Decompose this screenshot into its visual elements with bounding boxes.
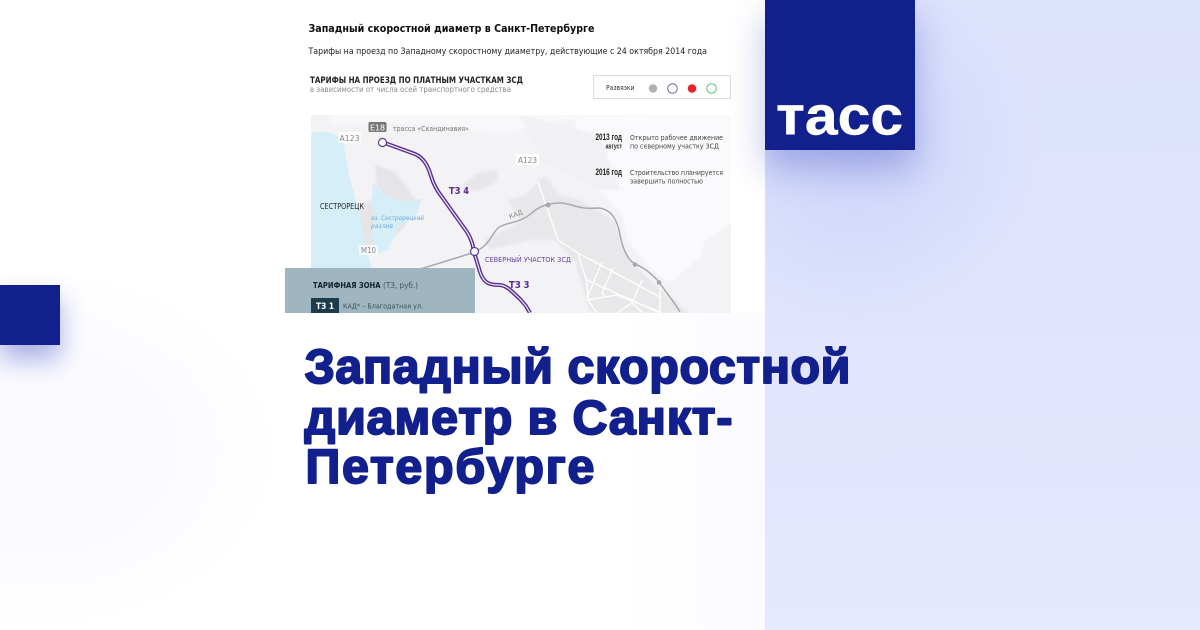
streets	[538, 182, 660, 313]
tariff zone panel: ТЗ 1	[316, 302, 334, 312]
decorative blue square	[0, 285, 60, 345]
road: KAD	[385, 203, 680, 312]
water: gulf	[311, 132, 372, 268]
tariff zone panel: ТАРИФНАЯ ЗОНА	[313, 281, 381, 290]
legend	[594, 76, 730, 98]
section label: northern section: СЕВЕРНЫЙ УЧАСТОК ЗСД	[485, 255, 571, 264]
road label: E18: Е18	[370, 124, 385, 132]
section heading: в зависимости от числа осей транспортного средства	[310, 85, 511, 94]
timeline note: 2013: август	[606, 142, 622, 150]
zone label: T3 4: ТЗ 4	[449, 186, 469, 197]
tariff zone panel: (ТЗ, руб.)	[383, 281, 418, 290]
logo: TASS: тасс	[776, 86, 903, 147]
road label: E18: трасса «Скандинавия»	[393, 125, 469, 133]
timeline note: 2016	[596, 167, 723, 186]
main title: диаметр в Санкт-	[304, 391, 732, 445]
main title: Петербурге	[306, 440, 594, 494]
timeline note: 2016: завершить полностью	[630, 178, 703, 186]
zone label: T3 3: ТЗ 3	[509, 280, 530, 291]
section heading	[310, 76, 523, 94]
timeline note: 2016: 2016 год	[596, 167, 622, 177]
map base	[311, 112, 735, 313]
place label: Sestroretsk: СЕСТРОРЕЦК	[320, 202, 365, 211]
road label: A123 west: А123	[340, 134, 360, 143]
main title: Западный скоростной	[304, 340, 850, 394]
infographic title: Западный скоростной диаметр в Санкт-Петербурге	[308, 23, 594, 35]
road label: M10: М10	[361, 246, 376, 255]
road label: E18	[368, 122, 469, 133]
lake label: оз. Сестрорецкий	[371, 214, 424, 222]
route: western high-speed diameter	[382, 142, 530, 313]
infographic subtitle: Тарифы на проезд по Западному скоростному диаметру, действующие с 24 октября 2014 года	[308, 47, 707, 57]
timeline note: 2013: по северному участку ЗСД	[630, 142, 719, 150]
main title	[304, 340, 850, 494]
lake label: разлив	[370, 222, 393, 230]
road label: A123 east: А123	[518, 156, 537, 165]
route nodes	[378, 138, 478, 256]
section heading: ТАРИФЫ НА ПРОЕЗД ПО ПЛАТНЫМ УЧАСТКАМ ЗСД	[310, 76, 523, 86]
timeline note: 2013: 2013 год	[596, 132, 622, 142]
timeline note: 2013	[596, 132, 723, 150]
water: lake	[370, 183, 422, 254]
legend: Развязки	[606, 84, 634, 92]
tariff zone panel	[285, 268, 475, 313]
background: right lavender panel	[765, 0, 1200, 630]
road label: KAD: КАД	[508, 208, 524, 221]
infographic preview image	[285, 23, 731, 313]
timeline note: 2016: Строительство планируется	[630, 169, 723, 177]
white fade below preview image	[285, 313, 765, 630]
background: left soft glow	[0, 270, 285, 630]
timeline note: 2013: Открыто рабочее движение	[630, 134, 723, 142]
road junctions	[546, 202, 661, 285]
tariff zone panel: КАД* – Благодатная ул.	[343, 302, 423, 310]
logo: TASS	[765, 0, 915, 150]
lake label	[370, 214, 424, 230]
